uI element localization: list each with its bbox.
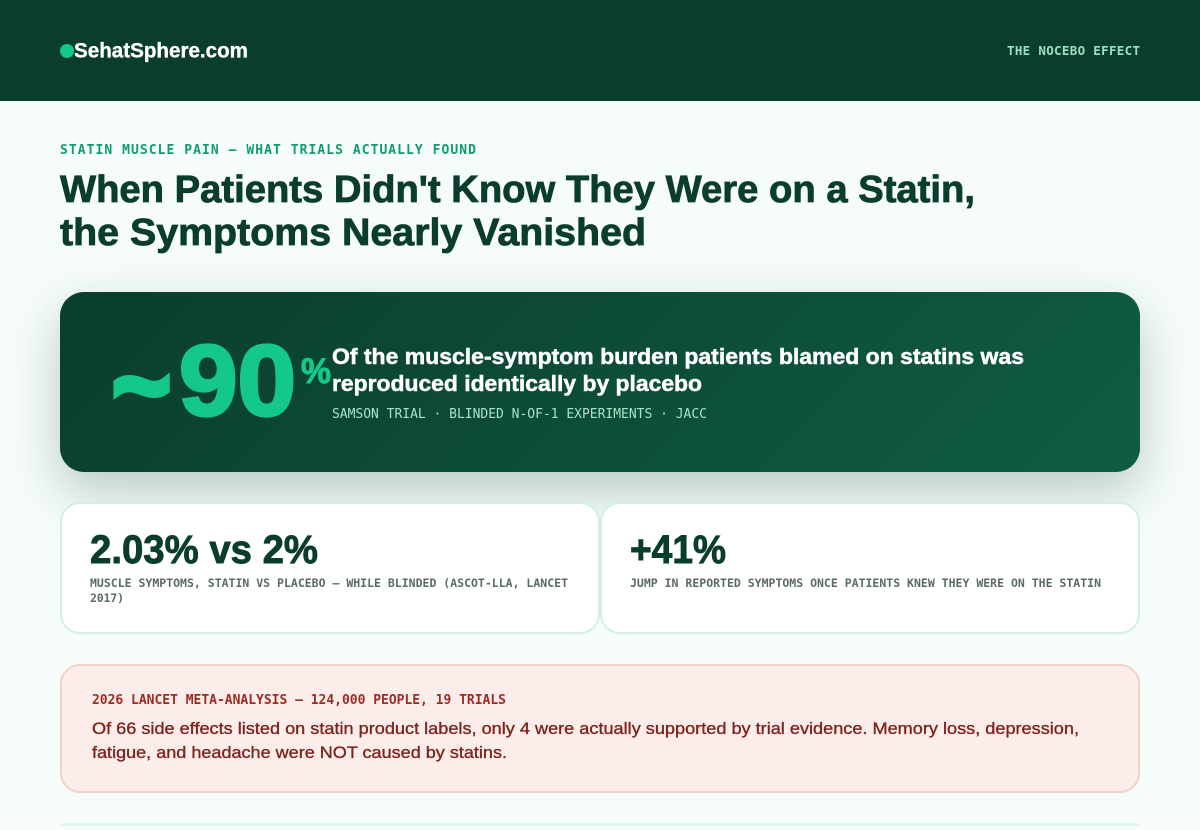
heading block — [60, 143, 975, 254]
callout label: 2026 LANCET META-ANALYSIS — 124,000 PEOPLE, 19 TRIALS — [92, 693, 506, 708]
big number: 90 — [179, 325, 296, 437]
big number: % — [301, 352, 331, 391]
big number: ~ — [113, 330, 170, 442]
panel: lancet callout — [60, 664, 1140, 793]
hero statement: reproduced identically by placebo — [332, 371, 702, 396]
stat caption: MUSCLE SYMPTOMS, STATIN VS PLACEBO — WHILE BLINDED (ASCOT-LLA, LANCET — [90, 576, 568, 590]
stat value: +41% — [630, 528, 726, 572]
hero source: SAMSON TRIAL · BLINDED N-OF-1 EXPERIMENTS · JACC — [332, 407, 707, 422]
stat value: 2.03% vs 2% — [90, 528, 318, 572]
callout body: fatigue, and headache were NOT caused by statins. — [92, 743, 507, 762]
eyebrow: STATIN MUSCLE PAIN — WHAT TRIALS ACTUALLY FOUND — [60, 143, 476, 158]
callout body — [92, 719, 1079, 762]
title: When Patients Didn't Know They Were on a Statin, — [60, 169, 975, 211]
big number — [113, 325, 331, 442]
logo wordmark: SehatSphere.com — [74, 40, 248, 62]
stat caption — [90, 576, 568, 605]
panel: stat card blinded — [60, 502, 600, 634]
stat caption: 2017) — [90, 591, 124, 605]
header bar — [0, 0, 1200, 101]
title: the Symptoms Nearly Vanished — [60, 212, 646, 254]
hero statement: Of the muscle-symptom burden patients blamed on statins was — [332, 344, 1024, 369]
panel: stat card unblinded — [600, 502, 1140, 634]
icon: logo dot — [60, 44, 74, 58]
header tag: THE NOCEBO EFFECT — [1007, 43, 1140, 58]
title — [60, 169, 975, 254]
panel: hero statistic — [60, 292, 1140, 472]
hero statement — [332, 344, 1024, 396]
callout body: Of 66 side effects listed on statin product labels, only 4 were actually supported by trial evidence. Memory loss, depression, — [92, 719, 1079, 738]
stat caption: JUMP IN REPORTED SYMPTOMS ONCE PATIENTS KNEW THEY WERE ON THE STATIN — [630, 576, 1101, 590]
